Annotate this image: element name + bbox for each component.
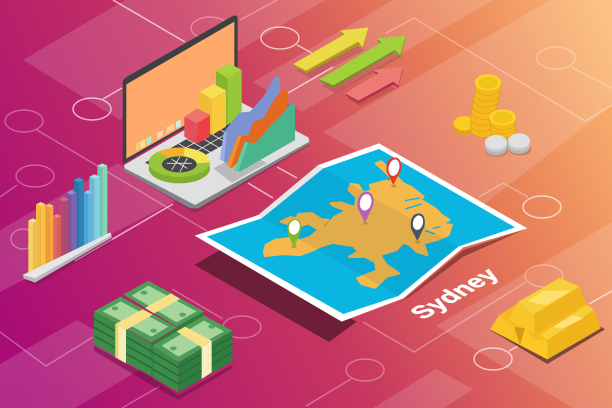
map water (207, 149, 515, 314)
bar 9 (89, 174, 100, 245)
bar 10 (97, 163, 107, 240)
bar 5 (59, 197, 69, 260)
arrow: green (319, 36, 406, 88)
short coin stack (490, 109, 516, 138)
top bar (508, 278, 586, 334)
bar 6 (67, 190, 77, 257)
bar 1 (28, 218, 38, 277)
area chart: green (234, 102, 295, 172)
pin: dark (411, 213, 425, 244)
gold silhouette (490, 277, 601, 359)
area chart: orange (227, 88, 287, 168)
arrow: red (345, 67, 403, 103)
chart base (23, 233, 112, 283)
trackpad (213, 150, 267, 183)
left coin (454, 116, 474, 135)
lower right bar (520, 305, 601, 359)
laptop screen (123, 15, 238, 163)
land (264, 162, 452, 288)
back stack (123, 281, 204, 352)
inlets (405, 198, 441, 234)
bar: red (184, 108, 210, 144)
banknote stacks (94, 281, 232, 400)
pin: green (287, 219, 301, 248)
arrow shadows (297, 42, 402, 107)
bar 3 (46, 204, 53, 267)
bar: green (216, 63, 242, 125)
bar 2 (36, 202, 46, 273)
map shadow (194, 230, 523, 342)
laptop base (124, 100, 310, 213)
map (194, 143, 527, 342)
coins (454, 74, 531, 157)
front stack (153, 316, 232, 392)
gold shadow (490, 327, 605, 364)
arrows (293, 27, 406, 107)
chart shadow (26, 238, 113, 285)
bar chart: rainbow (23, 163, 113, 285)
bar 7 (74, 177, 84, 250)
area chart: blue (220, 76, 280, 163)
arrow: yellow (293, 27, 368, 73)
map paper fold shade (258, 165, 323, 218)
bar 4 (53, 214, 61, 263)
gold bars (490, 277, 605, 364)
pin: red (386, 157, 401, 187)
left stack (94, 297, 177, 377)
lower left bar (490, 315, 525, 345)
pin: purple (357, 192, 374, 225)
silver coins (485, 133, 531, 157)
bar 8 (84, 190, 92, 247)
donut chart (149, 147, 210, 183)
money shadow (94, 346, 232, 400)
city label: Sydney: Sydney (404, 265, 506, 323)
laptop with charts (123, 15, 310, 213)
bar: yellow (200, 84, 226, 135)
map paper (195, 143, 527, 322)
tall coin stack (470, 74, 501, 137)
keyboard (145, 118, 247, 175)
map fold band (262, 168, 458, 296)
